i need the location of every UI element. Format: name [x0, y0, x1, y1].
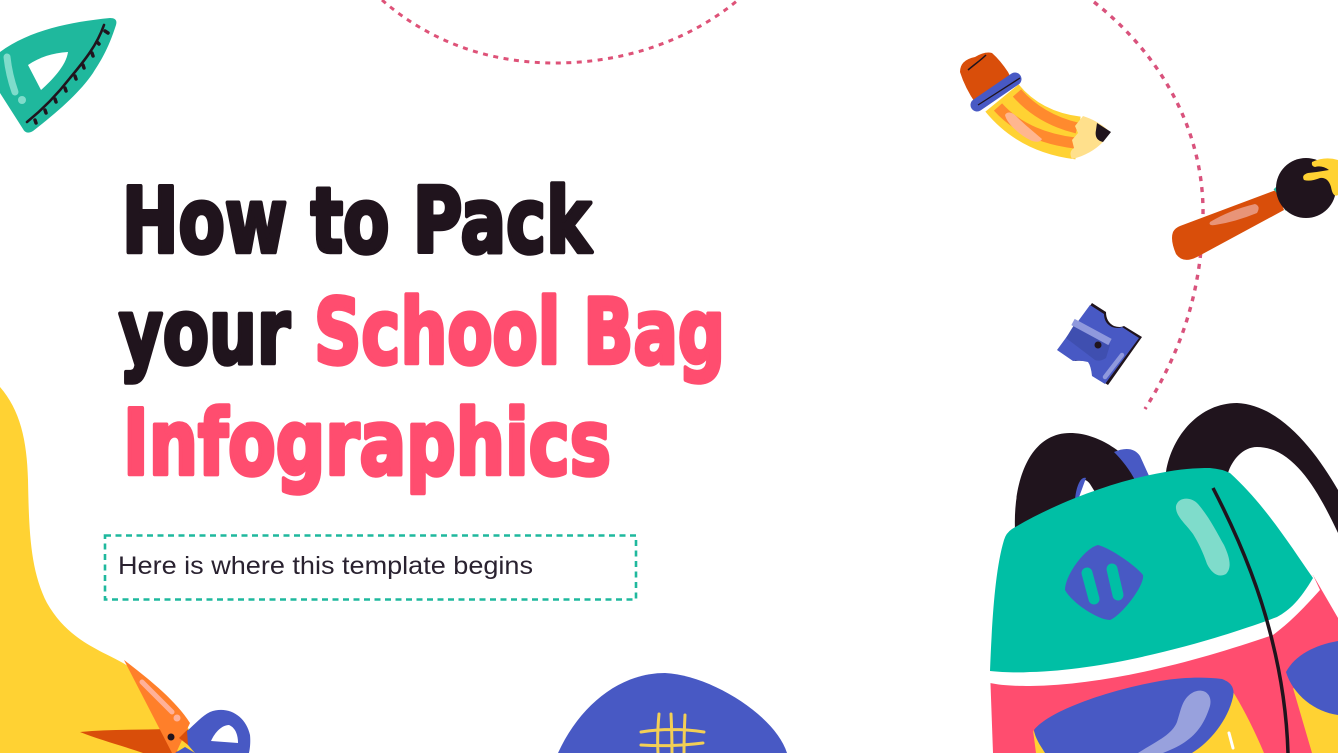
pink lower body — [990, 575, 1338, 753]
white band — [990, 575, 1320, 686]
right dotted arc — [1094, 2, 1203, 409]
yellow inside front pocket — [1033, 680, 1264, 753]
icon: pencil — [960, 52, 1111, 159]
side pocket flap — [1286, 641, 1338, 715]
title — [119, 169, 725, 496]
top handle — [1075, 449, 1150, 500]
right strap — [1166, 403, 1338, 533]
yellow blob — [0, 387, 200, 753]
teal top — [990, 468, 1313, 672]
subtitle box — [105, 536, 636, 600]
front pocket flap — [1034, 678, 1234, 753]
icon: paint brush — [1172, 158, 1338, 260]
teal highlight — [1176, 499, 1230, 576]
title: Infographics — [123, 391, 611, 496]
left strap — [1015, 433, 1146, 530]
icon: sharpener — [1057, 303, 1142, 385]
icon: set square ruler — [0, 18, 116, 133]
pocket highlight — [1138, 691, 1211, 753]
badge — [1065, 545, 1143, 620]
top dotted arc — [382, 0, 738, 63]
title: School Bag — [314, 280, 725, 385]
title: How to Pack — [122, 169, 593, 274]
pocket stitch — [1229, 733, 1233, 748]
subtitle box: Here is where this template begins — [118, 552, 533, 580]
zipper line — [1213, 488, 1288, 753]
icon: scissors — [80, 660, 250, 753]
title: your — [119, 280, 290, 385]
icon: backpack — [990, 403, 1338, 753]
side pocket yellow — [1293, 688, 1338, 753]
blue blob with hash mark — [558, 673, 787, 753]
